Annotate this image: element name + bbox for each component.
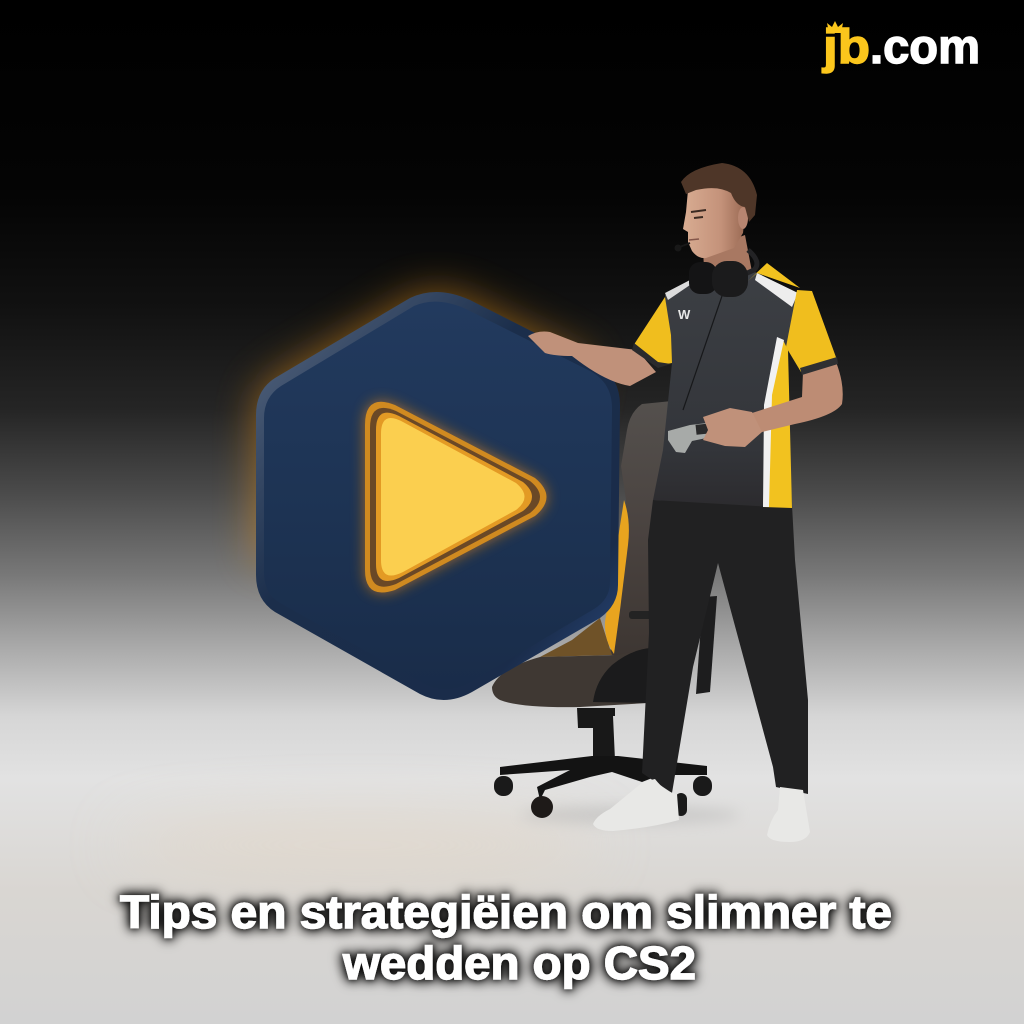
legs xyxy=(642,500,808,794)
headphone left cup xyxy=(689,262,717,294)
shirt left trim xyxy=(665,280,690,300)
logo: jb.com xyxy=(822,21,980,74)
floor shadows xyxy=(520,806,740,824)
hexagon rim xyxy=(256,292,620,700)
microphone xyxy=(677,243,690,248)
play triangle glow xyxy=(365,402,546,592)
shirt side yellow panel xyxy=(763,340,792,508)
controller dark center xyxy=(696,423,712,435)
right arm xyxy=(752,362,843,433)
headset cable xyxy=(683,296,722,410)
shirt body xyxy=(653,272,797,508)
neck xyxy=(703,235,752,285)
caster rear xyxy=(675,793,687,816)
chair rear bracket xyxy=(696,596,717,694)
mouth xyxy=(689,239,699,240)
head xyxy=(683,178,746,258)
chair side arm xyxy=(593,648,650,703)
floor warm reflection xyxy=(120,819,600,871)
ear xyxy=(738,207,748,229)
left sleeve xyxy=(633,297,672,366)
left arm xyxy=(528,332,656,386)
right cuff xyxy=(800,357,838,375)
shirt side white stripe xyxy=(763,337,784,507)
logo .com: .com xyxy=(870,21,980,74)
chair lower padding xyxy=(540,618,612,657)
play triangle border xyxy=(365,402,546,592)
shirt logo: W xyxy=(678,307,691,322)
gaming chair xyxy=(492,401,717,818)
chair seat xyxy=(492,648,650,707)
microphone tip xyxy=(674,244,682,252)
chair back xyxy=(610,401,672,660)
hair xyxy=(681,163,757,222)
shirt shoulder white trim xyxy=(755,273,798,307)
title line 1: Tips en strategiëien om slimner te xyxy=(120,886,892,938)
play triangle inner line xyxy=(370,408,540,587)
play triangle highlight line xyxy=(376,413,532,581)
hexagon glow xyxy=(256,292,590,560)
collar yellow xyxy=(748,263,800,288)
headset band xyxy=(745,250,757,274)
eye and brow xyxy=(691,210,706,218)
chair armrest xyxy=(629,611,653,619)
chair base xyxy=(500,756,707,800)
chair column xyxy=(577,708,615,760)
title line 2: wedden op CS2 xyxy=(342,937,696,989)
caster right xyxy=(693,776,712,796)
title xyxy=(120,886,892,989)
right shoe xyxy=(767,787,810,842)
play triangle fill xyxy=(381,418,524,576)
hexagon face xyxy=(264,302,612,690)
caster front xyxy=(531,796,553,818)
left shoe xyxy=(593,779,679,831)
hand xyxy=(703,408,762,447)
chair yellow strip xyxy=(605,500,629,654)
logo jb: jb xyxy=(822,21,870,74)
headphone right cup xyxy=(712,261,748,297)
icon: crown xyxy=(827,21,843,33)
left cuff xyxy=(632,343,671,368)
caster left xyxy=(494,776,513,796)
hexagon play badge xyxy=(256,292,620,700)
right sleeve xyxy=(786,290,837,372)
controller xyxy=(668,421,726,453)
person xyxy=(528,163,843,842)
